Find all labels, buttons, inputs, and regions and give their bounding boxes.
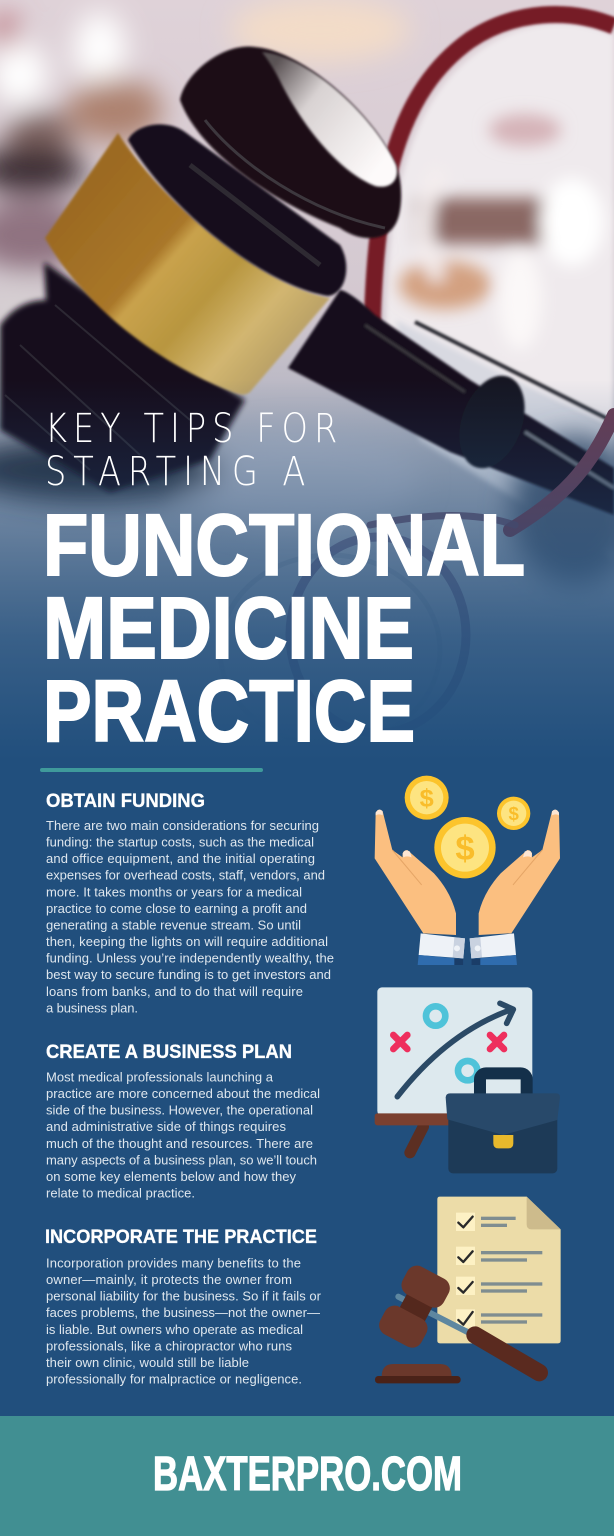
title: bold lines: PRACTICE: [43, 663, 415, 760]
text block: incorporate the practice: professionals, like a chiropractor who runs: [46, 1338, 292, 1353]
right hand: [470, 810, 560, 965]
coin: large: [434, 817, 496, 878]
coin: top left: [405, 776, 449, 820]
footer url: BAXTERPRO.COM: [153, 1448, 462, 1501]
stethoscope ear tube: [372, 14, 614, 560]
text block: create a business plan: relate to medical practice.: [46, 1186, 195, 1200]
text block: create a business plan: side of the business. However, the operational: [46, 1103, 313, 1118]
coin: large: $: [455, 830, 475, 868]
text block: obtain funding: best way to secure funding is to get investors and: [46, 967, 331, 982]
icon: strategy board and briefcase: [375, 987, 560, 1173]
text block: incorporate the practice: is liable. But owners who operate as medical: [46, 1322, 303, 1337]
text block: create a business plan: Most medical professionals launching a: [46, 1070, 274, 1084]
text block: incorporate the practice: professionally for malpractice or negligence.: [46, 1372, 302, 1386]
text block: obtain funding: practice to come close to earning a profit and: [46, 901, 307, 916]
footer band: [0, 1416, 614, 1536]
title: bold lines: MEDICINE: [43, 580, 414, 677]
section: obtain funding: [46, 790, 334, 1015]
icon: checklist and gavel: [375, 1197, 561, 1383]
briefcase: [446, 1073, 560, 1173]
text block: create a business plan: practice are more concerned about the medical: [46, 1086, 320, 1101]
gavel top knob: [180, 46, 401, 238]
text block: obtain funding: loans from banks, and to do that will require: [46, 984, 303, 999]
heading: incorporate the practice: INCORPORATE THE PRACTICE: [45, 1226, 317, 1248]
title: [43, 405, 525, 760]
title: light lines: STARTING A: [45, 448, 305, 495]
teal divider rule: [40, 768, 263, 772]
gavel collar: [128, 124, 346, 296]
text block: obtain funding: funding: the startup costs, such as the medical: [46, 835, 314, 850]
text block: incorporate the practice: [46, 1256, 322, 1386]
title: light lines: [45, 405, 337, 495]
text block: create a business plan: and administrative side of things requires: [46, 1119, 286, 1134]
title: bold lines: FUNCTIONAL: [43, 497, 525, 594]
checklist document: [437, 1197, 561, 1343]
text block: create a business plan: many aspects of a business plan, so we’ll touch: [46, 1152, 317, 1167]
text block: obtain funding: funding. Unless you’re independently wealthy, the: [46, 951, 334, 966]
text block: incorporate the practice: owner—mainly, it protects the owner from: [46, 1272, 292, 1287]
title: bold lines: [43, 497, 525, 760]
section: create a business plan: [46, 1041, 320, 1200]
title: light lines: KEY TIPS FOR: [45, 405, 337, 452]
coin: small right: $: [508, 803, 519, 824]
icon: hands with coins: [375, 776, 560, 965]
strategy board: [375, 987, 532, 1153]
text block: obtain funding: [46, 818, 334, 1015]
gavel gold band: [45, 133, 330, 395]
text block: create a business plan: on some key elements below and how they: [46, 1169, 296, 1184]
text block: incorporate the practice: faces problems, the business—not the owner—: [46, 1305, 320, 1320]
small gavel: [375, 1262, 539, 1383]
text block: create a business plan: much of the thought and resources. There are: [46, 1136, 313, 1151]
left hand: [375, 810, 465, 965]
text block: obtain funding: and office equipment, and the initial operating: [46, 851, 315, 866]
text block: obtain funding: There are two main considerations for securing: [46, 818, 319, 833]
text block: incorporate the practice: their own clinic, would still be liable: [46, 1355, 249, 1370]
hero photo: gavel and stethoscope: [0, 0, 614, 760]
coin: small right: [497, 797, 530, 830]
gavel handle: [288, 290, 614, 515]
gavel lower cap: [0, 262, 245, 492]
text block: obtain funding: a business plan.: [46, 1000, 138, 1015]
text block: obtain funding: generating a stable revenue stream. So until: [46, 918, 301, 932]
heading: obtain funding: OBTAIN FUNDING: [46, 790, 205, 812]
text block: incorporate the practice: Incorporation provides many benefits to the: [46, 1256, 301, 1270]
text block: obtain funding: expenses for overhead costs, staff, vendors, and: [46, 868, 325, 883]
text block: obtain funding: then, keeping the lights on will require additional: [46, 934, 328, 949]
heading: create a business plan: CREATE A BUSINESS PLAN: [46, 1041, 292, 1063]
section: incorporate the practice: [45, 1226, 322, 1386]
stethoscope coil: [286, 408, 614, 670]
text block: create a business plan: [46, 1070, 320, 1200]
text block: incorporate the practice: personal liability for the business. So if it fails or: [46, 1289, 322, 1304]
text block: obtain funding: more. It takes months or years for a medical: [46, 884, 302, 899]
coin: top left: $: [420, 785, 434, 813]
